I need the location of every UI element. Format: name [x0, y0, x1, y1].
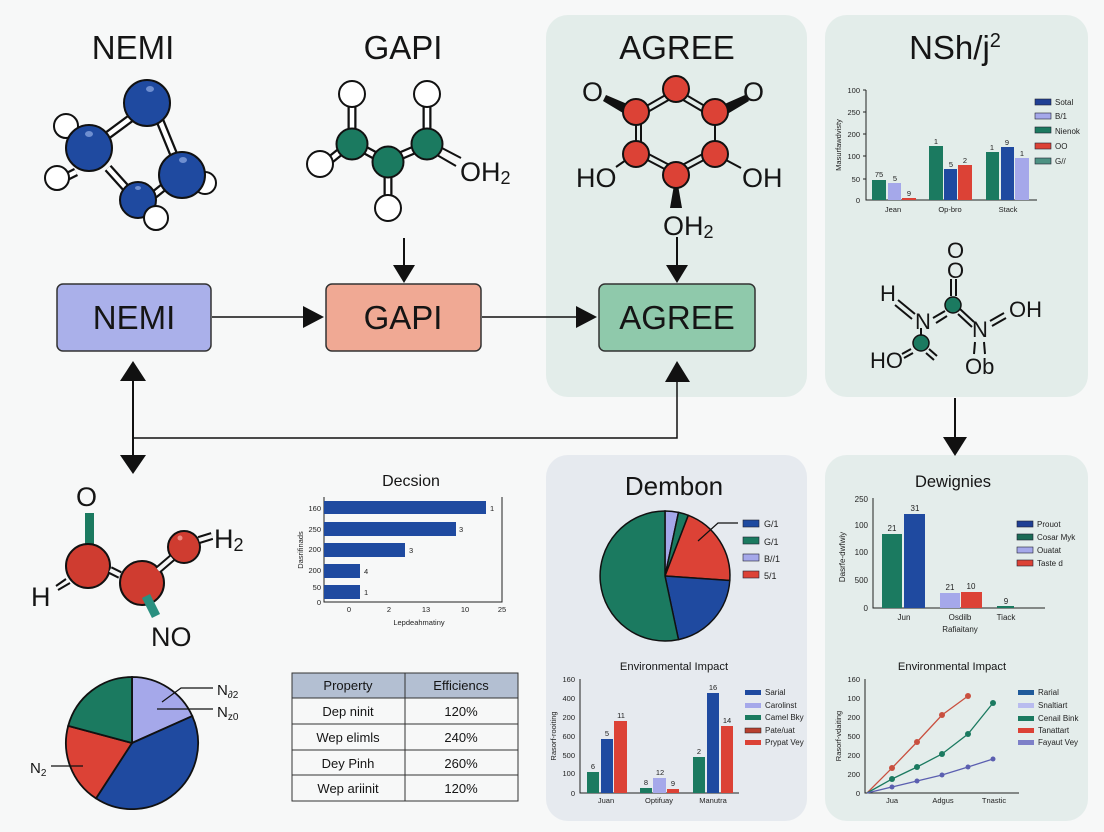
chart: Dewignies bars: Taste d [1037, 559, 1063, 568]
chart: Environmental Impact bars: Pate/uat [765, 726, 796, 735]
chart: Environmental Impact bars: Sarial [765, 688, 786, 697]
title: GAPI: GAPI [364, 29, 442, 66]
chart: NSh/j2 bar chart: Nienok [1055, 127, 1081, 136]
chart: Environmental Impact lines: 100 [847, 694, 860, 703]
icon: NEMI blue molecule [45, 80, 216, 230]
icon: GAPI green molecule: 2 [500, 168, 511, 188]
icon: lower-left red molecule: O [76, 482, 97, 512]
box: NEMI [57, 284, 211, 351]
chart: Dewignies bars: 10 [967, 582, 976, 591]
chart: Dewignies bars: 100 [855, 548, 869, 557]
chart: Environmental Impact bars: Environmental Impact [620, 661, 729, 673]
chart: Dewignies bars: Dasrfe-dwfwiy [838, 532, 847, 582]
arrow: NEMI to GAPI [212, 306, 324, 328]
chart: Dewignies bars: 250 [855, 495, 869, 504]
chart: Environmental Impact lines: Adgus [932, 796, 954, 805]
arrow: bidirectional NEMI to lower molecule [120, 361, 146, 474]
chart: NSh/j2 bar chart: G// [1055, 157, 1066, 166]
chart: NSh/j2 bar chart: 1 [1020, 149, 1024, 158]
chart: NSh/j2 bar chart: 200 [847, 130, 860, 139]
chart: Environmental Impact bars: 0 [571, 789, 575, 798]
table: property efficiency: Property [323, 678, 373, 693]
chart: Environmental Impact lines: 0 [856, 789, 860, 798]
chart: Decsion horizontal bars: 200 [308, 545, 321, 554]
chart: NSh/j2 bar chart: 9 [907, 189, 911, 198]
chart: Environmental Impact bars: 6 [591, 762, 595, 771]
icon: GAPI green molecule [307, 81, 511, 221]
chart: Decsion horizontal bars: Dasrifinads [296, 531, 305, 569]
panel: AGREE background [546, 15, 807, 397]
icon: AGREE red ring molecule: 2 [704, 222, 714, 242]
icon: NSh/j2 green molecule: H [880, 281, 896, 306]
chart: NSh/j2 bar chart: 1 [934, 137, 938, 146]
chart: Environmental Impact bars: Manutra [699, 796, 728, 805]
chart: lower-left pie: N [30, 760, 41, 777]
icon: GAPI green molecule: OH [460, 157, 500, 187]
chart: NSh/j2 bar chart: 100 [847, 152, 860, 161]
chart: Dembon pie: G/1 [764, 537, 779, 547]
chart: Environmental Impact bars: 11 [617, 711, 625, 720]
icon: NSh/j2 green molecule: HO [870, 348, 903, 373]
icon: NSh/j2 green molecule: Ob [965, 354, 994, 379]
chart: Dewignies bars: 21 [888, 524, 897, 533]
icon: lower-left red molecule: NO [151, 622, 192, 652]
chart: Dembon pie: 5/1 [764, 571, 777, 581]
table: property efficiency: Efficiencs [433, 678, 489, 693]
box: GAPI: GAPI [364, 299, 442, 336]
icon: AGREE red ring molecule: O [743, 77, 764, 107]
icon: AGREE red ring molecule: OH [742, 163, 782, 193]
chart: Environmental Impact bars: 160 [562, 675, 575, 684]
icon: NSh/j2 green molecule [870, 238, 1042, 379]
chart: lower-left pie: 2 [41, 768, 47, 779]
icon: AGREE red ring molecule: OH [663, 211, 704, 241]
chart: Dewignies bars: 9 [1004, 597, 1009, 606]
chart: NSh/j2 bar chart: 250 [847, 108, 860, 117]
icon: AGREE red ring molecule: HO [576, 163, 616, 193]
arrow: GAPI molecule to GAPI box [393, 238, 415, 283]
chart: Dewignies bars: Tiack [997, 613, 1016, 622]
heading: Dembon: Dembon [625, 471, 723, 501]
chart: Dewignies bars [838, 495, 1076, 634]
chart: Environmental Impact lines: Environmental Impact [898, 661, 1007, 673]
chart: Decsion horizontal bars: 3 [409, 546, 413, 555]
title: NSh/j2: 2 [990, 30, 1001, 52]
chart: Decsion horizontal bars: 50 [313, 583, 321, 592]
chart: Environmental Impact bars: 8 [644, 778, 648, 787]
chart: Environmental Impact bars: Camel Bky [765, 713, 804, 722]
chart: Decsion horizontal bars: 3 [459, 525, 463, 534]
title: AGREE: AGREE [619, 29, 735, 66]
arrow: feedback to AGREE [133, 361, 690, 438]
table: property efficiency [292, 673, 518, 801]
chart: lower-left pie: z0 [228, 712, 239, 723]
chart: lower-left pie [30, 677, 239, 809]
chart: Decsion horizontal bars: 200 [308, 566, 321, 575]
chart: Environmental Impact bars: 16 [709, 683, 717, 692]
panel: Dembon background [546, 455, 807, 821]
chart: NSh/j2 bar chart: Stack [999, 205, 1018, 214]
chart: Environmental Impact bars: 200 [562, 713, 575, 722]
chart: Decsion horizontal bars: 10 [461, 605, 469, 614]
chart: Environmental Impact bars: 600 [562, 732, 575, 741]
chart: NSh/j2 bar chart: 50 [852, 175, 860, 184]
chart: Dewignies bars: 500 [855, 576, 869, 585]
chart: Environmental Impact lines: 500 [847, 732, 860, 741]
table: property efficiency: Dey Pinh [322, 756, 374, 771]
chart: Environmental Impact bars: 400 [562, 694, 575, 703]
chart: Environmental Impact bars: Rasorf-rooiting [549, 711, 558, 761]
chart: Environmental Impact lines: Jua [886, 796, 899, 805]
chart: Environmental Impact lines: Fayaut Vey [1038, 738, 1078, 747]
chart: Environmental Impact bars: 500 [562, 751, 575, 760]
chart: NSh/j2 bar chart: Masurfawdvisty [834, 119, 843, 171]
box: AGREE: AGREE [619, 299, 735, 336]
chart: NSh/j2 bar chart: 5 [893, 174, 897, 183]
chart: Decsion horizontal bars: 4 [364, 567, 368, 576]
icon: AGREE red ring molecule [576, 76, 782, 242]
chart: Environmental Impact bars: 12 [656, 768, 664, 777]
box: AGREE [599, 284, 755, 351]
chart: Dewignies bars: Jun [898, 613, 910, 622]
chart: NSh/j2 bar chart: B/1 [1055, 112, 1068, 121]
chart: Environmental Impact bars: 100 [562, 769, 575, 778]
icon: NSh/j2 green molecule: N [972, 317, 988, 342]
table: property efficiency: Dep ninit [322, 704, 374, 719]
box: NEMI: NEMI [93, 299, 175, 336]
chart: Dewignies bars: Prouot [1037, 520, 1061, 529]
chart: Environmental Impact bars: 14 [723, 716, 731, 725]
chart: Decsion horizontal bars: 1 [364, 588, 368, 597]
chart: NSh/j2 bar chart: 0 [856, 196, 860, 205]
chart: Decsion horizontal bars: 160 [308, 504, 321, 513]
chart: Decsion horizontal bars: Decsion [382, 473, 440, 490]
chart: NSh/j2 bar chart: 2 [963, 156, 967, 165]
icon: lower-left red molecule: H [31, 582, 50, 612]
chart: Environmental Impact lines: 200 [847, 751, 860, 760]
chart: Environmental Impact lines: Tanattart [1038, 726, 1070, 735]
icon: AGREE red ring molecule: O [582, 77, 603, 107]
chart: Environmental Impact bars [549, 661, 804, 805]
table: property efficiency: 120% [444, 781, 478, 796]
chart: Decsion horizontal bars: 1 [490, 504, 494, 513]
table: property efficiency: 240% [444, 730, 478, 745]
icon: NSh/j2 green molecule: OH [1009, 297, 1042, 322]
chart: Dewignies bars: Rafiaitany [942, 625, 978, 634]
table: property efficiency: 120% [444, 704, 478, 719]
chart: NSh/j2 bar chart: 100 [847, 86, 860, 95]
heading: Dewignies: Dewignies [915, 473, 991, 491]
chart: Decsion horizontal bars: 13 [422, 605, 430, 614]
chart: Environmental Impact lines: Rarial [1038, 688, 1059, 697]
chart: Environmental Impact lines: Tnastic [982, 796, 1006, 805]
icon: NSh/j2 green molecule: N [915, 309, 931, 334]
chart: Environmental Impact bars: Optifuay [645, 796, 673, 805]
chart: NSh/j2 bar chart [834, 86, 1081, 214]
chart: Environmental Impact lines: Rasorf-vdaiting [834, 711, 843, 761]
chart: Environmental Impact bars: Juan [598, 796, 614, 805]
table: property efficiency: Wep elimls [316, 730, 380, 745]
arrow: AGREE molecule to AGREE box [666, 237, 688, 283]
arrow: NSh panel to Dewignies panel [943, 398, 967, 456]
chart: Environmental Impact bars: 5 [605, 729, 609, 738]
chart: Decsion horizontal bars: 2 [387, 605, 391, 614]
chart: Environmental Impact lines [834, 661, 1079, 805]
chart: NSh/j2 bar chart: 1 [990, 143, 994, 152]
panel: Dewignies background [825, 455, 1088, 821]
chart: NSh/j2 bar chart: Jean [885, 205, 901, 214]
chart: Environmental Impact lines: Cenail Bink [1038, 714, 1079, 723]
icon: NSh/j2 green molecule: O [947, 258, 964, 283]
chart: Environmental Impact lines: 200 [847, 713, 860, 722]
chart: Decsion horizontal bars [296, 473, 506, 627]
chart: Environmental Impact lines: Snaltiart [1038, 701, 1068, 710]
chart: Dewignies bars: Cosar Myk [1037, 533, 1076, 542]
chart: Environmental Impact bars: 9 [671, 779, 675, 788]
box: GAPI [326, 284, 481, 351]
chart: Environmental Impact bars: Carolinst [765, 701, 797, 710]
arrow: GAPI to AGREE [482, 306, 597, 328]
icon: lower-left red molecule: 2 [234, 535, 244, 555]
chart: NSh/j2 bar chart: OO [1055, 142, 1067, 151]
chart: Environmental Impact lines: 160 [847, 675, 860, 684]
chart: Dewignies bars: 100 [855, 521, 869, 530]
title: NSh/j2: NSh/j [909, 29, 990, 66]
chart: Dewignies bars: 0 [864, 604, 869, 613]
chart: Environmental Impact lines: 200 [847, 770, 860, 779]
chart: Dembon pie [600, 511, 780, 641]
chart: Dembon pie: G/1 [764, 519, 779, 529]
chart: NSh/j2 bar chart: Sotal [1055, 98, 1073, 107]
chart: Environmental Impact bars: Prypat Vey [765, 738, 804, 747]
table: property efficiency: 260% [444, 756, 478, 771]
chart: Dewignies bars: 31 [911, 504, 920, 513]
chart: Decsion horizontal bars: 250 [308, 525, 321, 534]
chart: lower-left pie: N [217, 704, 228, 721]
chart: Dewignies bars: 21 [946, 583, 955, 592]
chart: Dewignies bars: Ouatat [1037, 546, 1062, 555]
chart: lower-left pie: ∂2 [228, 690, 239, 701]
chart: lower-left pie: N [217, 682, 228, 699]
chart: NSh/j2 bar chart: 5 [949, 160, 953, 169]
chart: Decsion horizontal bars: Lepdeahmatiny [393, 618, 445, 627]
icon: lower-left red molecule [31, 482, 244, 652]
chart: Dewignies bars: Osdilb [949, 613, 972, 622]
icon: NSh/j2 green molecule: O [947, 238, 964, 263]
table: property efficiency: Wep ariinit [317, 781, 379, 796]
title: NEMI: NEMI [92, 29, 174, 66]
chart: NSh/j2 bar chart: 9 [1005, 138, 1009, 147]
chart: Decsion horizontal bars: 25 [498, 605, 506, 614]
panel: NSh/j2 background [825, 15, 1088, 397]
chart: Decsion horizontal bars: 0 [347, 605, 351, 614]
chart: NSh/j2 bar chart: 75 [875, 170, 883, 179]
chart: NSh/j2 bar chart: Op-bro [938, 205, 962, 214]
icon: lower-left red molecule: H [214, 524, 234, 554]
chart: Environmental Impact bars: 2 [697, 747, 701, 756]
chart: Decsion horizontal bars: 0 [317, 598, 321, 607]
chart: Dembon pie: B//1 [764, 554, 780, 564]
